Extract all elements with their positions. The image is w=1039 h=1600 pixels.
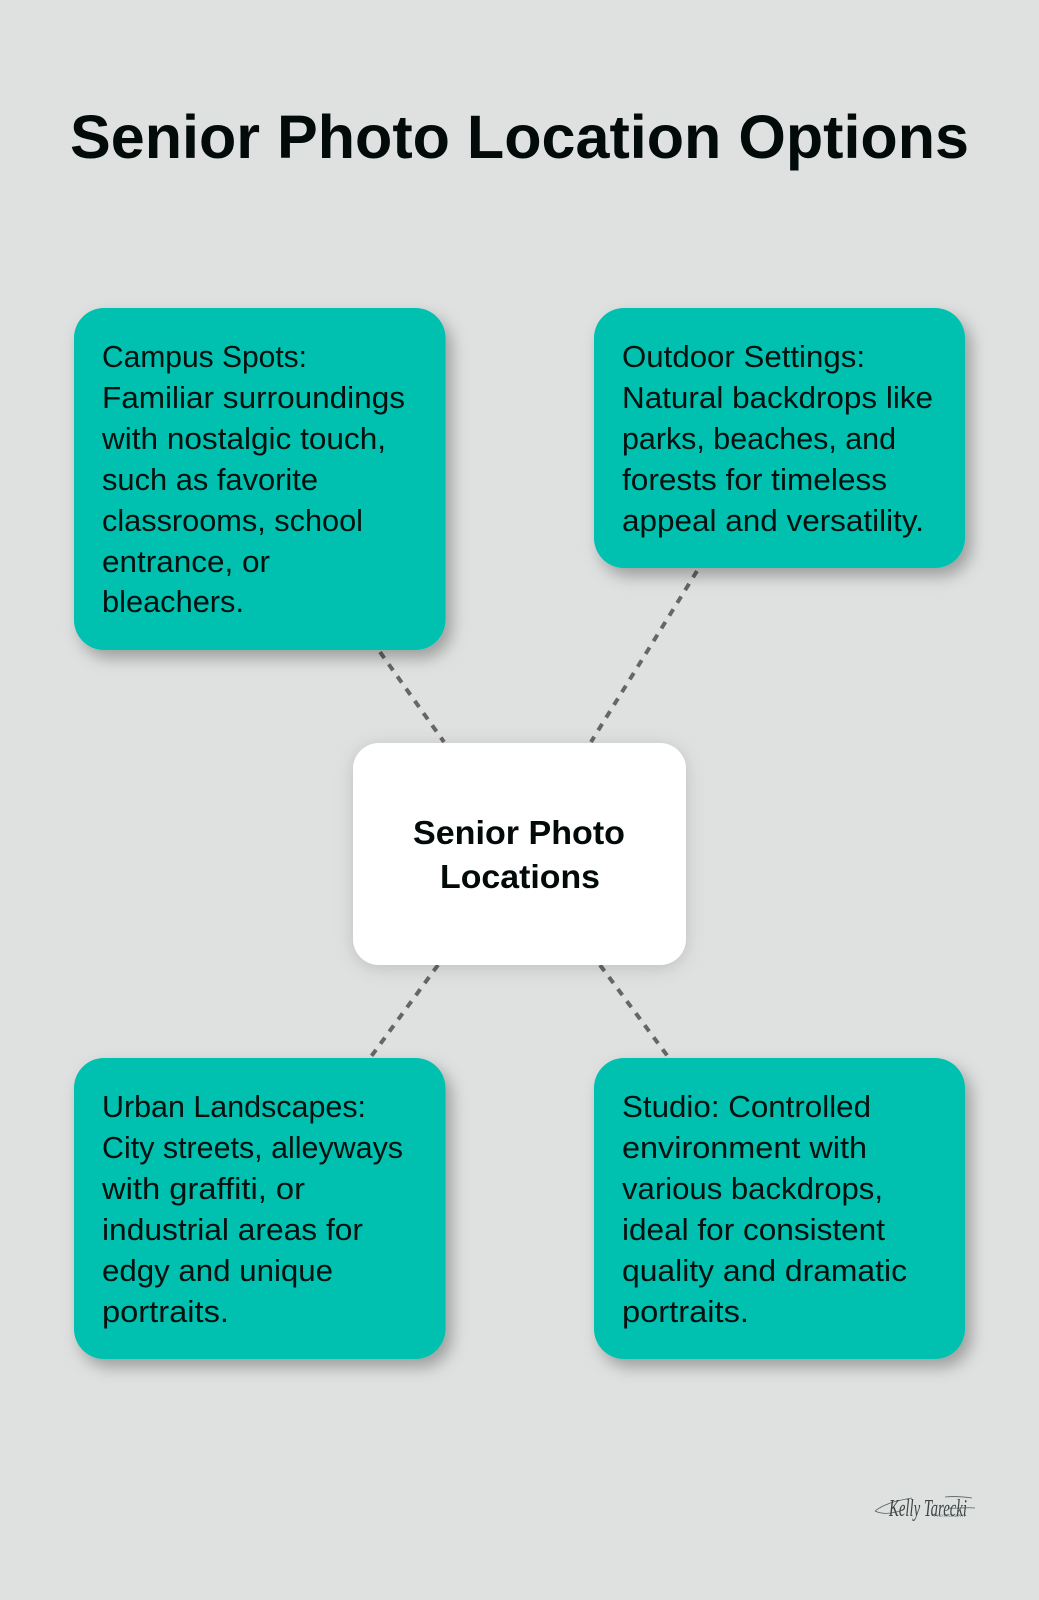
panel: campus spots: Familiar surroundings [102, 380, 405, 415]
panel: urban landscapes: portraits. [102, 1294, 229, 1329]
connector: studio to center [600, 965, 669, 1058]
panel: urban landscapes: with graffiti, or [101, 1171, 305, 1206]
panel: center node [353, 743, 686, 965]
panel: outdoor settings: Outdoor Settings: [622, 339, 865, 374]
panel: campus spots [74, 308, 446, 650]
logo: signature: Kelly Tarecki [888, 1496, 967, 1522]
panel: campus spots: classrooms, school [102, 503, 363, 538]
panel: center node: Locations [440, 858, 600, 895]
panel: urban landscapes: City streets, alleyways [102, 1130, 403, 1165]
panel: outdoor settings: forests for timeless [622, 462, 887, 497]
panel: campus spots: such as favorite [102, 462, 318, 497]
panel: studio: Studio: Controlled [622, 1089, 871, 1124]
panel: campus spots: bleachers. [102, 584, 244, 619]
panel: campus spots: with nostalgic touch, [101, 421, 386, 456]
title: Senior Photo Location Options [70, 103, 969, 171]
connector: outdoor settings to center [591, 571, 697, 742]
logo: signature: PHOTOGRAPHY [934, 1514, 967, 1518]
panel: studio: environment with [622, 1130, 867, 1165]
panel: campus spots: Campus Spots: [102, 339, 307, 374]
panel: studio: various backdrops, [622, 1171, 883, 1206]
panel: center node: Senior Photo [413, 814, 625, 851]
panel: urban landscapes [74, 1058, 446, 1359]
connector: campus spots to center [380, 652, 444, 742]
logo: signature [875, 1496, 975, 1522]
panel: campus spots: entrance, or [102, 544, 270, 579]
connector: urban landscapes to center [370, 965, 438, 1058]
panel: studio: quality and dramatic [622, 1253, 907, 1288]
panel: urban landscapes: industrial areas for [102, 1212, 363, 1247]
panel: outdoor settings: appeal and versatility. [622, 503, 924, 538]
panel: outdoor settings: Natural backdrops like [622, 380, 933, 415]
panel: outdoor settings [594, 308, 965, 568]
panel: studio [594, 1058, 965, 1359]
panel: urban landscapes: edgy and unique [102, 1253, 333, 1288]
panel: outdoor settings: parks, beaches, and [622, 421, 896, 456]
panel: studio: ideal for consistent [622, 1212, 885, 1247]
panel: urban landscapes: Urban Landscapes: [102, 1089, 366, 1124]
panel: studio: portraits. [622, 1294, 749, 1329]
